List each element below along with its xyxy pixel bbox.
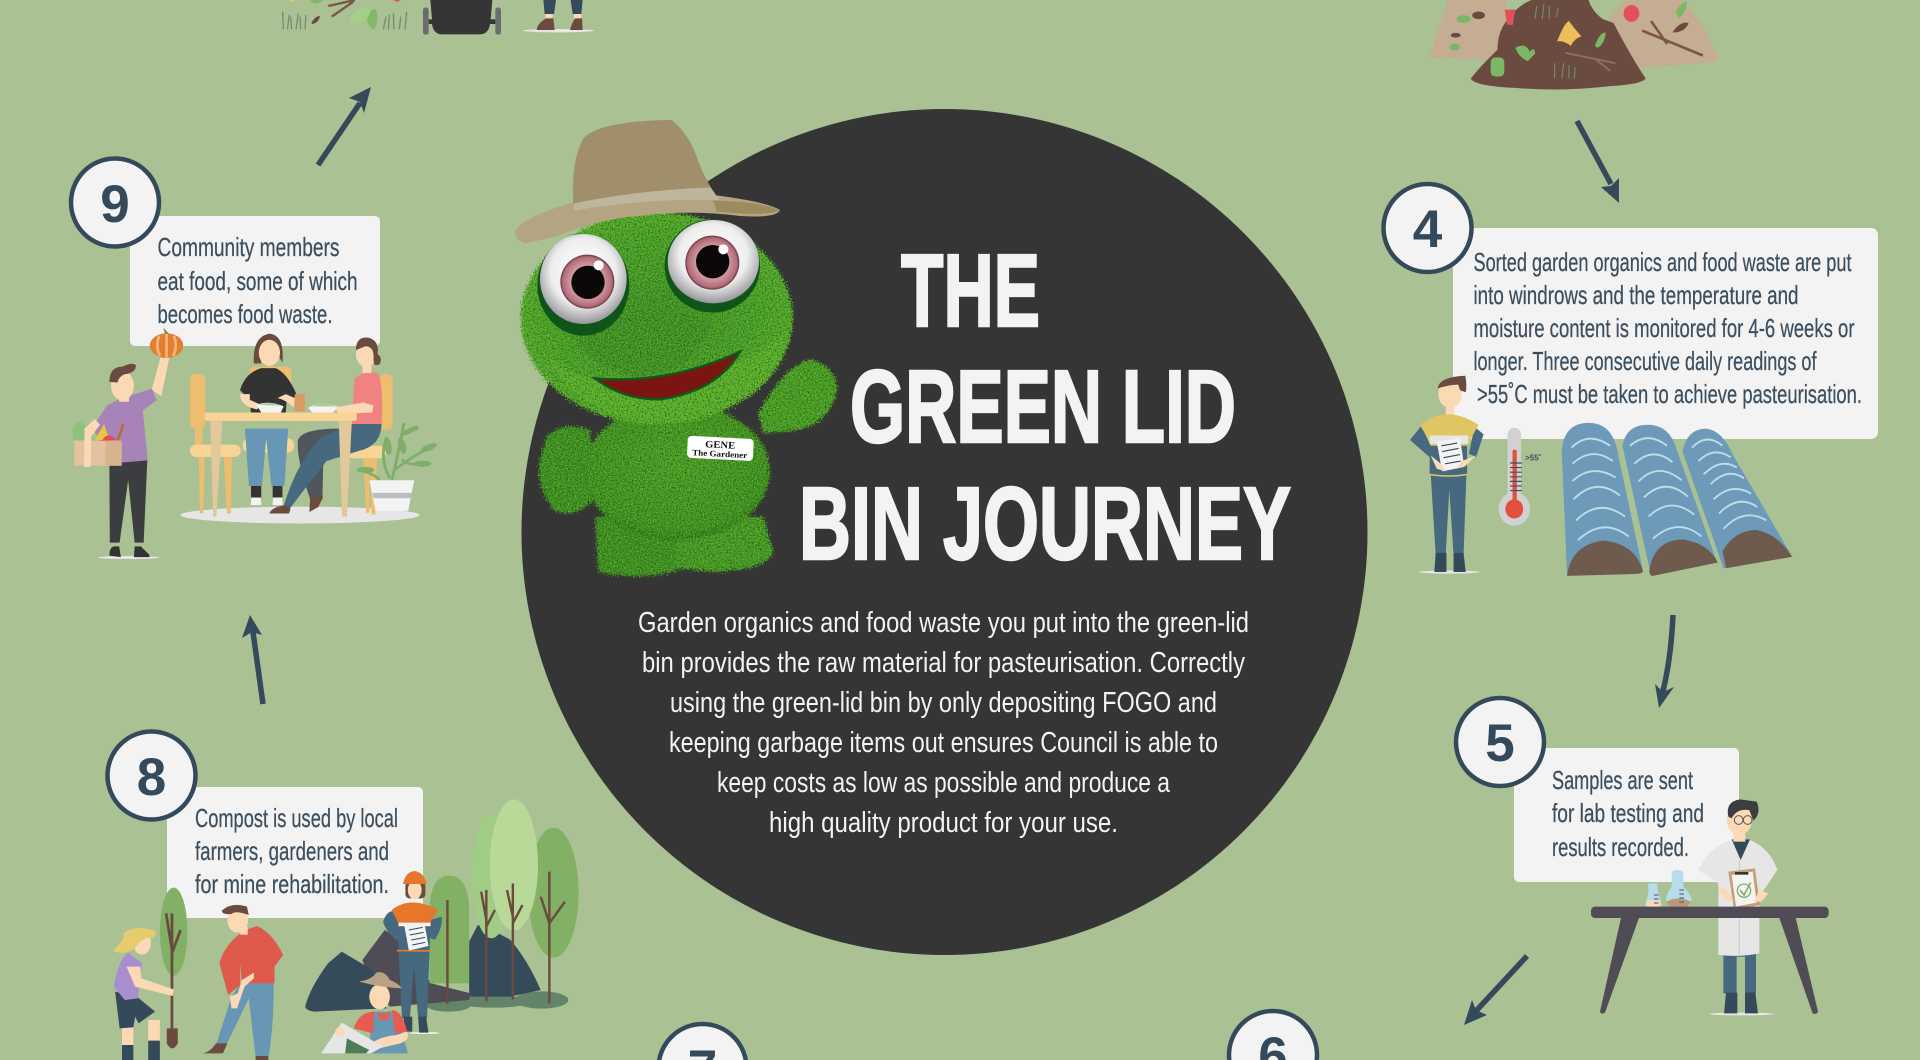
arrow: step 5 to step 6 (1464, 956, 1527, 1025)
step 5 panel (1456, 698, 1739, 882)
step 9 panel: 9 (100, 175, 130, 234)
step 8 panel: 8 (137, 748, 166, 807)
step 6 number badge (1229, 1011, 1317, 1060)
intro paragraph: using the green-lid bin by only depositing FOGO and (670, 687, 1217, 719)
intro paragraph: keeping garbage items out ensures Council is able to (669, 727, 1218, 759)
step 9 panel: Community members (158, 232, 340, 262)
step 5 panel: results recorded. (1552, 832, 1689, 862)
arrow: step 3 to step 4 (1577, 121, 1619, 203)
left eye (537, 234, 629, 336)
mouth (595, 352, 740, 399)
name tag: GENE (705, 439, 736, 452)
step 5 panel: for lab testing and (1552, 798, 1704, 828)
step 1 illustration fragment: organics, bin, person (283, 0, 594, 35)
man with shovel (201, 905, 283, 1060)
worker in orange (383, 871, 442, 1034)
name tag: The Gardener (692, 448, 748, 460)
thermometer: >55˚ (1525, 453, 1542, 462)
step 8 panel: for mine rehabilitation. (195, 869, 389, 899)
step 9 panel: becomes food waste. (158, 299, 332, 329)
arrow: step 8 to step 9 (242, 615, 263, 704)
name tag (687, 436, 754, 461)
farmer with compost bag (321, 972, 408, 1053)
intro paragraph: bin provides the raw material for pasteurisation. Correctly (642, 647, 1245, 679)
central dark circle (522, 109, 1368, 955)
step 8 illustration: planting and mine rehabilitation (113, 799, 579, 1060)
step 7 number badge (658, 1024, 746, 1060)
step 9 panel (71, 158, 380, 346)
step 9 illustration: people eating (72, 328, 438, 559)
step 4 panel: into windrows and the temperature and (1474, 280, 1798, 310)
step 5 panel: Samples are sent (1552, 765, 1694, 795)
title (799, 233, 1291, 581)
title: BIN JOURNEY (799, 466, 1291, 581)
step 5 illustration: scientist at lab bench (1591, 799, 1829, 1015)
title: THE (901, 233, 1040, 348)
intro paragraph: high quality product for your use. (769, 807, 1118, 839)
intro paragraph (638, 607, 1249, 839)
intro paragraph: keep costs as low as possible and produce a (717, 767, 1171, 799)
mascot: Gene the Gardener (515, 120, 837, 576)
thermometer (1499, 428, 1542, 526)
hat (515, 120, 780, 243)
step 9 panel: eat food, some of which (158, 266, 358, 296)
title: GREEN LID (850, 349, 1236, 464)
step 5 panel: 5 (1485, 714, 1515, 773)
step 4 illustration: windrows, worker, thermometer (1410, 376, 1792, 576)
woman with tree (113, 888, 187, 1060)
arrow: step 4 to step 5 (1655, 615, 1674, 708)
step 8 panel: Compost is used by local (195, 803, 398, 833)
right eye (665, 219, 760, 313)
step 4 panel: 4 (1413, 200, 1443, 259)
arrow: step 9 to step 1 (318, 87, 371, 165)
step 3 illustration fragment: compost piles (1430, 0, 1718, 90)
intro paragraph: Garden organics and food waste you put into the green-lid (638, 607, 1249, 639)
step 8 panel (108, 732, 423, 918)
step 4 panel (1384, 184, 1878, 439)
step 8 panel: farmers, gardeners and (195, 836, 389, 866)
